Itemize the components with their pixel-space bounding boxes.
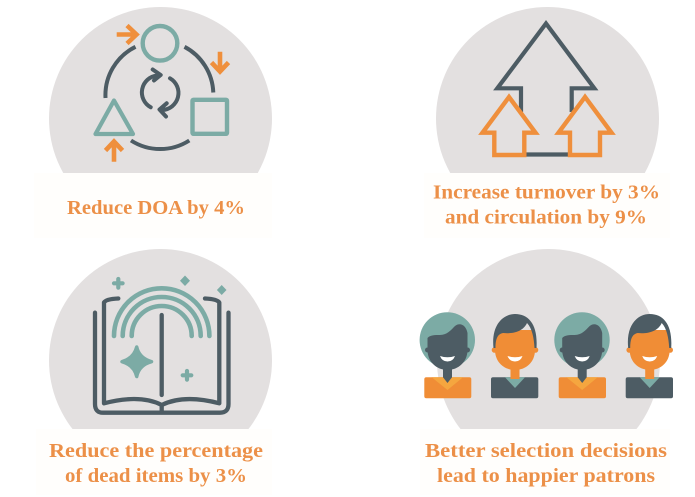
caption: Better selection decisions (425, 440, 667, 462)
caption: Reduce DOA by 4% (67, 197, 245, 219)
icon: right orange arrow (558, 97, 612, 155)
caption line 2: of dead items by 3% (65, 465, 247, 487)
grey semicircle (437, 249, 660, 429)
caption: Increase turnover by 3% (433, 182, 660, 204)
panel: dead items (36, 249, 272, 495)
caption background (420, 429, 670, 495)
icon: process cycle (96, 26, 227, 149)
panel: increase turnover (434, 7, 659, 228)
icon: patron 4 (626, 314, 673, 398)
icon: orange arrows (106, 26, 228, 162)
grey semicircle (436, 7, 659, 173)
caption background (36, 429, 272, 495)
caption line 2: and circulation by 9% (445, 206, 647, 228)
caption line 2: lead to happier patrons (437, 465, 655, 487)
icon: large dark arrow (497, 24, 594, 154)
icon: patron 3 (554, 312, 610, 398)
grey semicircle (49, 7, 272, 173)
caption background (424, 173, 670, 238)
icon: rainbow (114, 288, 209, 336)
caption background (34, 173, 272, 238)
grey semicircle (49, 249, 272, 429)
panel: reduce DOA (49, 7, 272, 218)
panel: happier patrons (420, 249, 673, 495)
icon: sparkles (114, 276, 226, 380)
caption: Reduce the percentage (49, 440, 263, 462)
icon: patron 1 (420, 312, 475, 398)
icon: open book (95, 298, 228, 413)
icon: patron 2 (491, 314, 538, 398)
icon: left orange arrow (482, 97, 536, 155)
